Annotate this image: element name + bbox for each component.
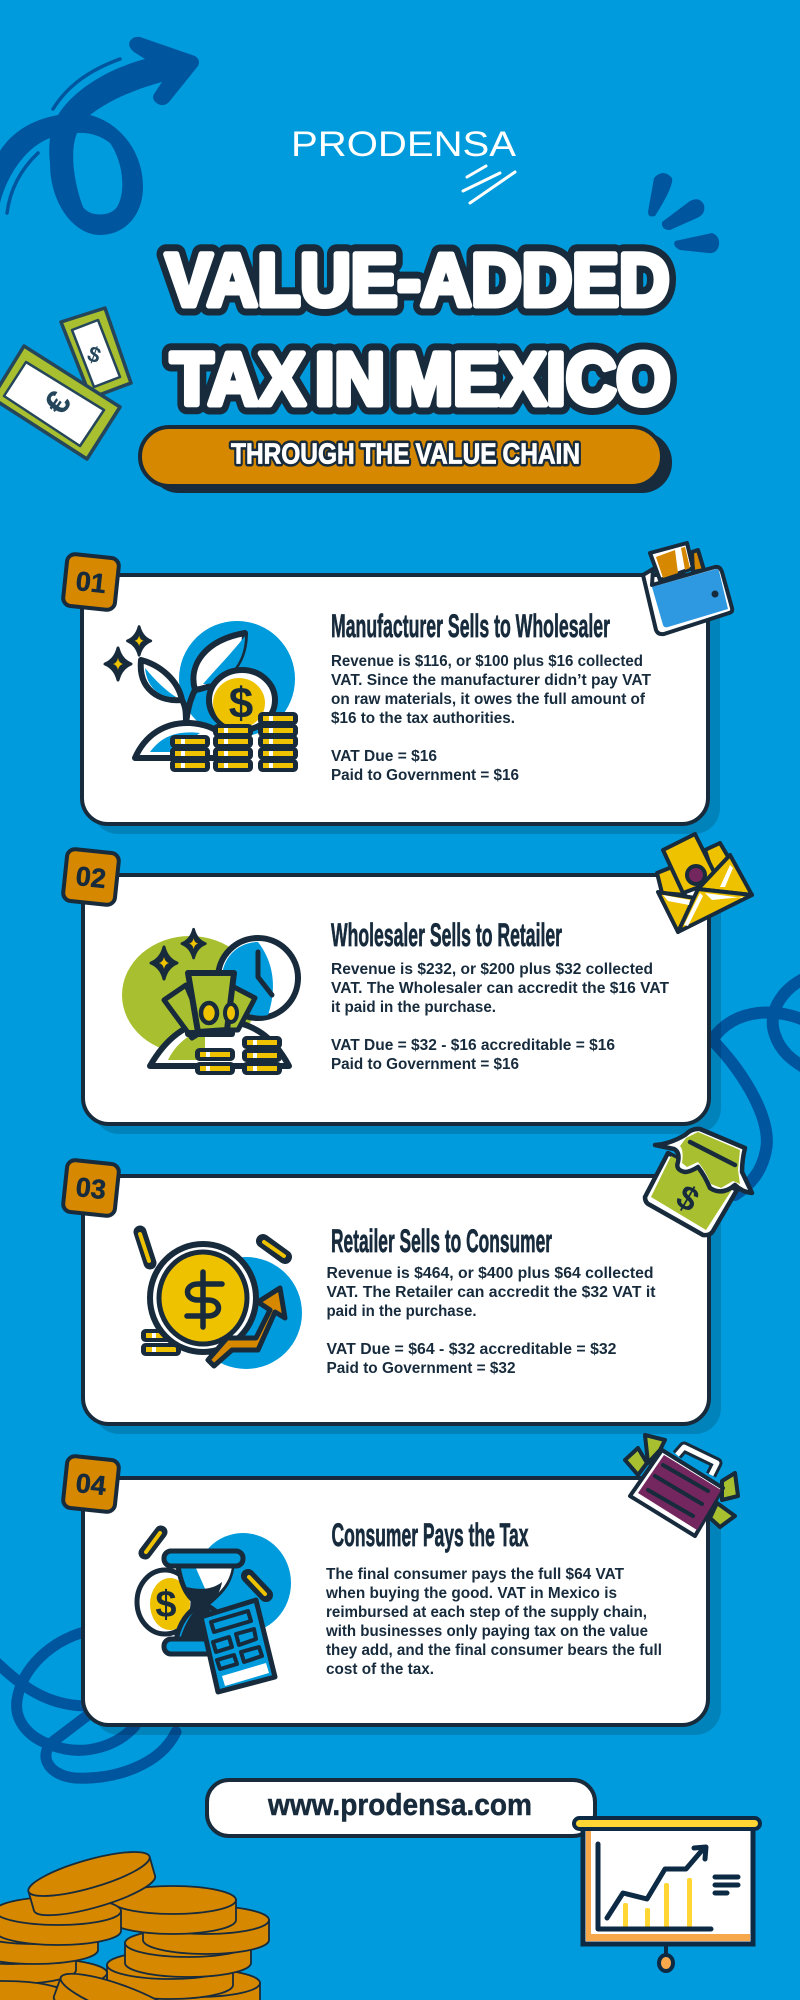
icon: hourglass and calculator: $ (155, 1584, 177, 1626)
panel: step 1 (82, 575, 720, 834)
icon: money and clock (122, 929, 298, 1075)
text block: it paid in the purchase. (331, 999, 496, 1016)
banknotes: $ (84, 341, 104, 368)
heading: Retailer Sells to Consumer (331, 1223, 552, 1259)
panel: step 4 (83, 1478, 721, 1735)
decorative swirl arrow (0, 37, 199, 235)
badge 01 (62, 553, 120, 611)
text block: on raw materials, it owes the full amount of (331, 691, 646, 708)
icon: jar with dollar: $ (670, 1178, 705, 1220)
text block: Revenue is $464, or $400 plus $64 collected (326, 1265, 654, 1282)
text block: VAT Due = $64 - $32 accreditable = $32 (326, 1341, 616, 1358)
text block (326, 1265, 656, 1377)
banknotes: € (37, 384, 79, 422)
subtitle banner (140, 427, 672, 493)
text block: The final consumer pays the full $64 VAT (326, 1566, 625, 1583)
text block: when buying the good. VAT in Mexico is (325, 1585, 617, 1602)
badge 04: 04 (74, 1468, 107, 1501)
icon: briefcase with cash (625, 1435, 738, 1536)
title: TAX IN MEXICO (170, 338, 670, 420)
heading: Consumer Pays the Tax (332, 1517, 529, 1553)
text block (331, 653, 652, 784)
text block (331, 961, 670, 1073)
icon: chart on projector screen (574, 1818, 760, 1971)
banknotes (0, 308, 131, 459)
icon: hourglass and calculator (137, 1532, 291, 1692)
website pill: www.prodensa.com (267, 1787, 532, 1822)
icon: wallet (643, 543, 732, 634)
icon: plant and coins: $ (229, 679, 253, 728)
accent marks (648, 173, 719, 253)
website pill (207, 1780, 595, 1836)
badge 04 (62, 1455, 120, 1513)
icon: plant and coins (105, 621, 298, 772)
subtitle banner: THROUGH THE VALUE CHAIN (231, 438, 580, 470)
text block: VAT. The Wholesaler can accredit the $16 VAT (331, 980, 670, 997)
badge 02 (62, 848, 120, 906)
logo (291, 125, 517, 203)
text block: Revenue is $232, or $200 plus $32 collected (331, 961, 653, 978)
badge 03: 03 (74, 1172, 107, 1205)
text block: reimbursed at each step of the supply chain, (326, 1604, 647, 1621)
text block: VAT Due = $32 - $16 accreditable = $16 (331, 1037, 615, 1054)
text block: VAT Due = $16 (331, 748, 437, 765)
text block: $16 to the tax authorities. (331, 710, 515, 727)
logo: PRODENSA (291, 125, 517, 164)
title: VALUE-ADDED (166, 238, 670, 322)
icon: jar with dollar (645, 1129, 752, 1235)
text block: paid in the purchase. (326, 1303, 476, 1320)
subtitle banner: THROUGH THE VALUE CHAIN (231, 438, 580, 470)
icon: envelope with cash (657, 834, 752, 932)
decorative swirl bottom left (0, 1632, 176, 1778)
badge 02: 02 (74, 861, 107, 894)
text block: VAT. The Retailer can accredit the $32 VAT it (326, 1284, 656, 1301)
text block: VAT. Since the manufacturer didn’t pay VAT (331, 672, 652, 689)
decorative swirl right (712, 975, 800, 1195)
heading: Wholesaler Sells to Retailer (331, 917, 562, 953)
title: TAX IN MEXICO (170, 338, 670, 420)
icon: coin with arrow (140, 1232, 302, 1369)
text block: they add, and the final consumer bears the full (326, 1642, 662, 1659)
title (166, 238, 670, 420)
coin pile (0, 1843, 269, 2000)
panel: step 2 (83, 875, 721, 1134)
text block: cost of the tax. (326, 1661, 434, 1678)
panel: step 3 (83, 1176, 721, 1434)
badge 01: 01 (74, 566, 107, 599)
title: VALUE-ADDED (166, 238, 670, 322)
text block: Paid to Government = $16 (331, 767, 519, 784)
text block: with businesses only paying tax on the value (325, 1623, 648, 1640)
badge 03 (62, 1159, 120, 1217)
text block: Paid to Government = $32 (326, 1360, 516, 1377)
text block (325, 1566, 662, 1678)
text block: Revenue is $116, or $100 plus $16 collected (331, 653, 643, 670)
text block: Paid to Government = $16 (331, 1056, 519, 1073)
